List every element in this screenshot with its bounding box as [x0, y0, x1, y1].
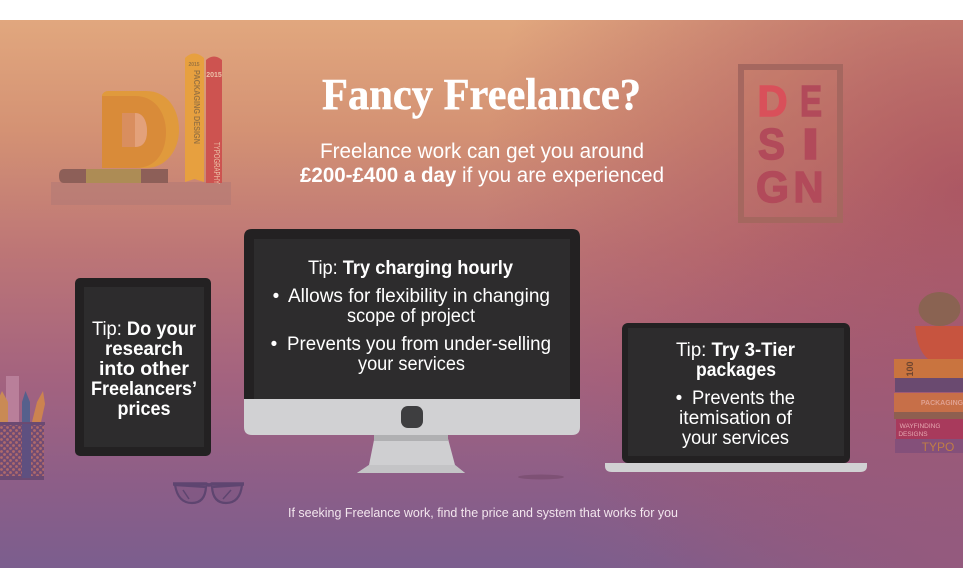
- title: Fancy Freelance?: [322, 70, 641, 119]
- illustration: framed design poster: G: [756, 163, 789, 212]
- illustration: cactus and book stack: DESIGNS: [898, 431, 928, 438]
- illustration: shelf with letter D and books: TYPOGRAPHY: [212, 142, 221, 184]
- tablet: research tip: [75, 278, 211, 456]
- subtitle: £200-£400 a day if you are experienced: [300, 164, 664, 187]
- desktop monitor: hourly tip: •: [271, 334, 277, 355]
- desktop monitor: hourly tip: •: [273, 286, 279, 307]
- illustration: shelf with letter D and books: [51, 54, 231, 205]
- tablet: research tip: research: [105, 339, 183, 360]
- desktop monitor: hourly tip: your services: [358, 354, 465, 375]
- desktop monitor: hourly tip: Allows for flexibility in changing: [288, 286, 550, 307]
- tablet: research tip: Freelancers’: [91, 379, 197, 400]
- illustration: glasses: [173, 484, 244, 503]
- illustration: shelf with letter D and books: PACKAGING DESIGN: [192, 70, 202, 144]
- tablet: research tip: prices: [118, 399, 170, 420]
- illustration: cactus and book stack: [894, 292, 963, 454]
- tablet: research tip: Tip: Do your: [92, 319, 197, 340]
- laptop: 3-tier tip: itemisation of: [679, 408, 793, 429]
- illustration: framed design poster: D: [758, 77, 788, 126]
- illustration: framed design poster: [741, 67, 840, 220]
- desktop monitor: hourly tip: [244, 229, 580, 473]
- illustration: shelf with letter D and books: 2015: [188, 62, 200, 68]
- illustration: mouse: [518, 474, 564, 480]
- laptop: 3-tier tip: [605, 323, 867, 472]
- illustration: framed design poster: S: [758, 120, 785, 169]
- laptop: 3-tier tip: packages: [696, 360, 776, 381]
- laptop: 3-tier tip: Tip: Try 3-Tier: [676, 340, 796, 361]
- desktop monitor: hourly tip: scope of project: [347, 306, 476, 327]
- illustration: cactus and book stack: PACKAGING: [921, 400, 963, 407]
- illustration: shelf with letter D and books: 2015: [206, 72, 222, 79]
- laptop: 3-tier tip: •: [676, 388, 682, 409]
- illustration: cactus and book stack: TYPO: [922, 440, 954, 454]
- illustration: framed design poster: E: [800, 77, 822, 126]
- desktop monitor: hourly tip: Prevents you from under-selling: [287, 334, 551, 355]
- footer note: If seeking Freelance work, find the price and system that works for you: [288, 505, 678, 520]
- illustration: framed design poster: I: [802, 120, 820, 169]
- desktop monitor: hourly tip: Tip: Try charging hourly: [308, 258, 513, 279]
- laptop: 3-tier tip: Prevents the: [692, 388, 795, 409]
- subtitle: [300, 140, 664, 187]
- illustration: framed design poster: N: [794, 163, 824, 212]
- illustration: pencil holder: [0, 376, 45, 480]
- laptop: 3-tier tip: your services: [682, 428, 789, 449]
- subtitle: Freelance work can get you around: [320, 140, 644, 163]
- tablet: research tip: into other: [99, 359, 190, 380]
- illustration: cactus and book stack: 100: [905, 361, 915, 377]
- illustration: cactus and book stack: WAYFINDING: [900, 423, 940, 430]
